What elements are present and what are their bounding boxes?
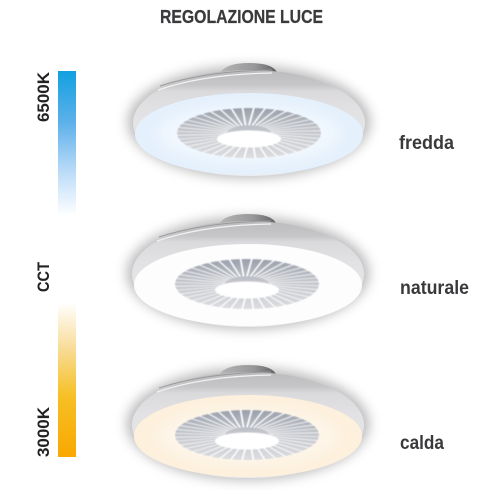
label: CCT: CCT bbox=[34, 261, 53, 292]
lamp: warm light bbox=[127, 365, 369, 480]
colour temperature scale bbox=[34, 71, 76, 457]
warm gradient bar bbox=[58, 303, 76, 457]
label: 3000K: 3000K bbox=[34, 406, 53, 457]
cool gradient bar bbox=[58, 71, 76, 216]
title: REGOLAZIONE LUCE bbox=[160, 7, 323, 27]
label: naturale: naturale bbox=[400, 278, 469, 299]
lamp: natural light bbox=[127, 214, 369, 329]
label: 6500K: 6500K bbox=[34, 71, 53, 122]
lamp: cold light bbox=[128, 63, 370, 178]
label: fredda: fredda bbox=[399, 133, 454, 154]
label: calda: calda bbox=[400, 433, 444, 454]
